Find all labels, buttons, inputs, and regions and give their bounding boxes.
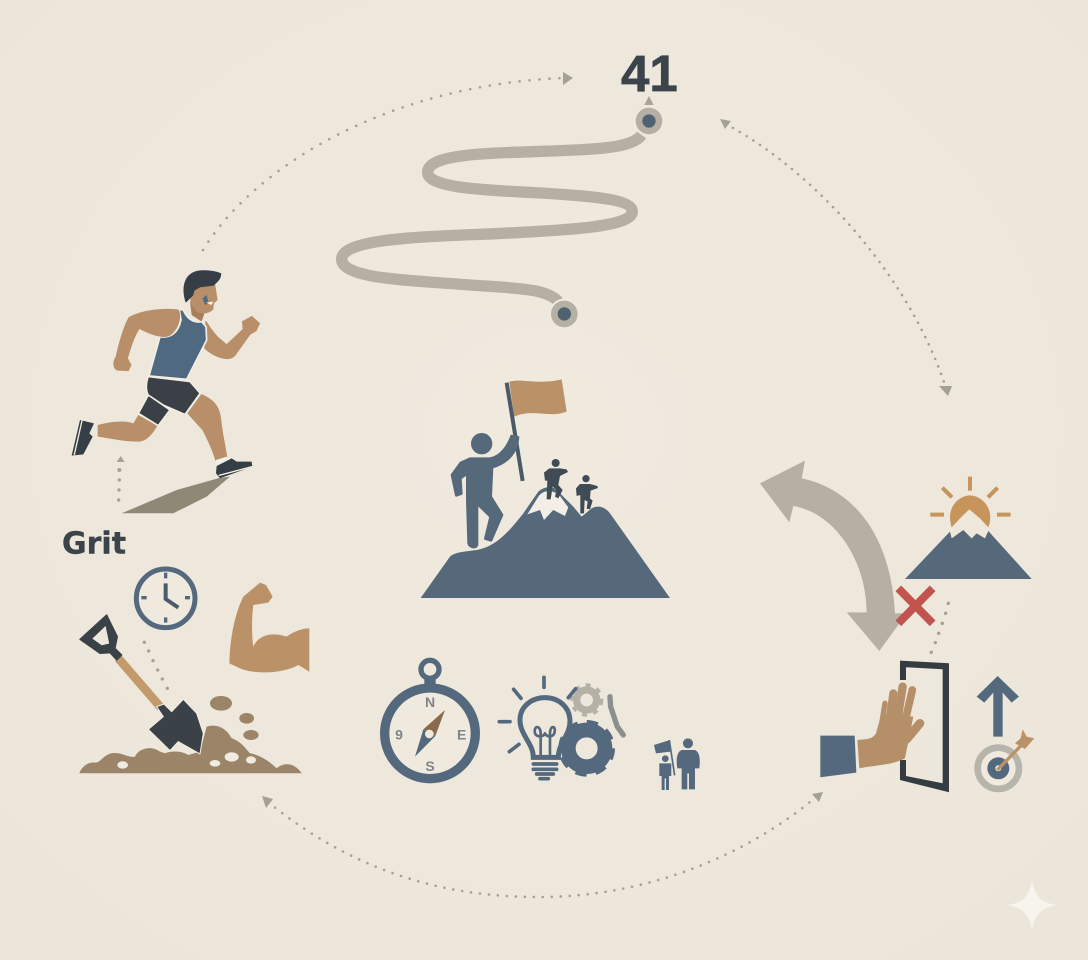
curved double arrow (760, 461, 907, 651)
sock (216, 457, 229, 467)
rear arm (205, 317, 259, 358)
shorts (138, 395, 170, 426)
rear sole stripe (74, 421, 82, 455)
icon: stop hand (857, 687, 920, 768)
icon: compass: 9 (395, 727, 403, 743)
icon: compass (385, 660, 475, 779)
tool icons row (385, 660, 700, 790)
icon: shovel (80, 615, 203, 754)
dotted arc: top left (203, 72, 573, 250)
summit scene (421, 379, 670, 598)
top waypoint (634, 96, 664, 136)
icon: target and dart (978, 729, 1034, 789)
dotted arc: top right (720, 119, 952, 396)
rear shoe (72, 420, 94, 456)
icon: clock (136, 569, 195, 628)
ground shadow (122, 477, 230, 513)
sole stripe (219, 467, 252, 475)
icon: gear (562, 724, 611, 773)
grit icons (79, 569, 309, 773)
dirt pile (79, 726, 302, 773)
face mark (203, 295, 209, 305)
icon: leader and child with flag (654, 738, 700, 790)
snow cap (527, 491, 568, 520)
dotted connector (930, 602, 950, 654)
front shoe (216, 458, 252, 478)
dotted rise arrow (117, 456, 125, 502)
rear leg (98, 415, 157, 442)
winding path (342, 96, 664, 329)
icon: compass: S (425, 758, 435, 774)
icon: faded gear (572, 685, 601, 715)
sleeve cuff (820, 736, 856, 777)
icon: flexed bicep (229, 583, 309, 672)
dirt gaps (117, 752, 256, 769)
runner (72, 271, 259, 513)
dotted arc: bottom (262, 792, 823, 897)
icon: compass: N (425, 694, 435, 710)
front leg (188, 395, 227, 460)
sparkle star (1007, 880, 1057, 930)
small climber one (544, 459, 568, 499)
label: Grit: Grit (62, 526, 126, 562)
flag (509, 379, 567, 417)
flag pole (507, 383, 523, 481)
face (190, 283, 218, 313)
mountain (421, 487, 670, 598)
hair (184, 271, 221, 302)
icon: wrench (610, 697, 623, 735)
bottom waypoint (549, 299, 580, 329)
number 41: 41 (621, 45, 678, 102)
dotted connector (143, 641, 169, 690)
neck (190, 302, 207, 322)
icon: distant mountain (905, 530, 1032, 579)
smile (206, 302, 213, 305)
right side icons (760, 461, 1034, 792)
small climber two (576, 475, 598, 513)
icon: light bulb (499, 677, 576, 779)
door frame (900, 661, 949, 792)
vest (149, 309, 207, 379)
icon: compass: E (457, 727, 466, 743)
icon: sun (930, 477, 1011, 527)
icon: up arrow (977, 676, 1019, 737)
front arm (114, 309, 180, 371)
red cross (898, 588, 933, 623)
flying rocks (210, 696, 259, 740)
large climber (452, 434, 518, 547)
